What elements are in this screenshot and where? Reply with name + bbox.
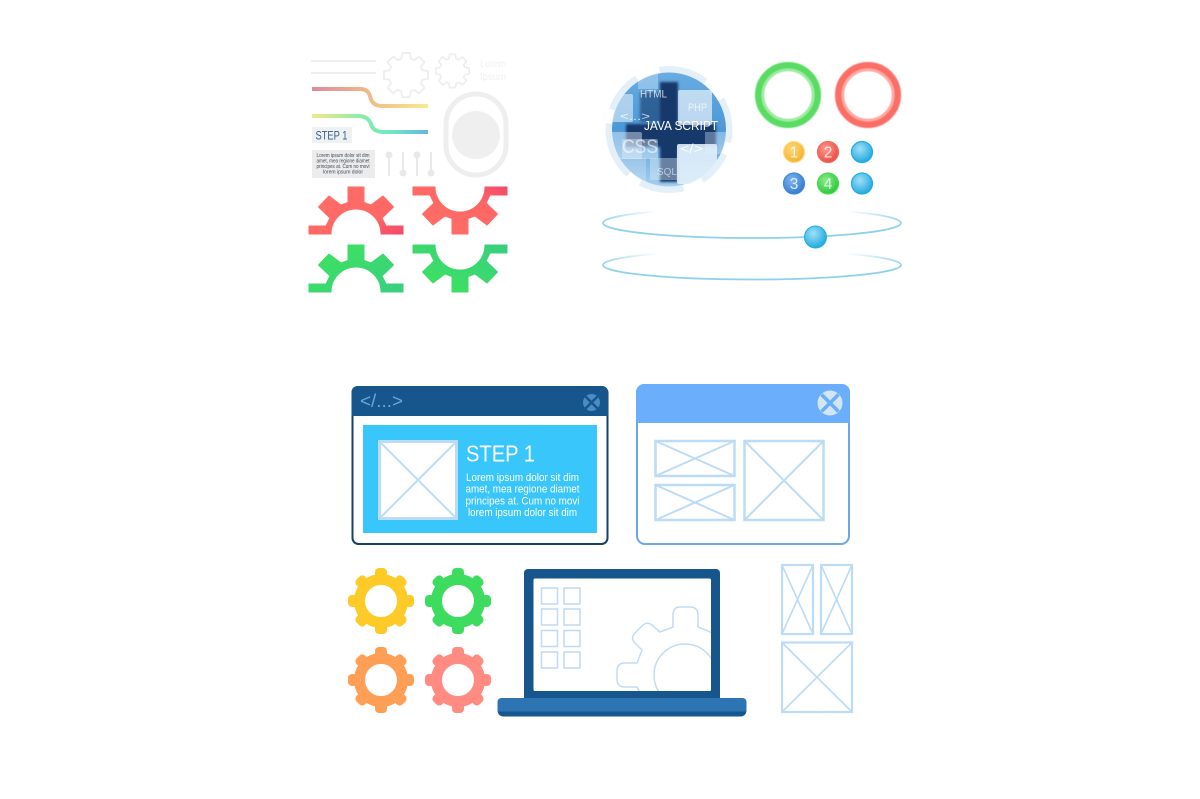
- globe labels: HTML: [640, 88, 667, 100]
- laptop: [498, 569, 746, 716]
- half gears: [309, 187, 507, 292]
- icon: close button: [583, 394, 600, 411]
- laptop screen: [534, 578, 711, 691]
- globe labels: [620, 88, 718, 178]
- gradient line two: [312, 116, 428, 132]
- globe labels: JAVA SCRIPT: [644, 118, 718, 133]
- green gear: [425, 568, 491, 634]
- blue content panel: [363, 425, 597, 533]
- faded caption: Ipsum: [480, 72, 506, 83]
- window header: [352, 386, 608, 416]
- step label: STEP 1: [316, 128, 348, 142]
- gradient line one: [312, 89, 428, 106]
- colored gears: [348, 568, 491, 713]
- oval toggle: [446, 94, 506, 175]
- step description: amet, mea regione diamet: [466, 484, 580, 496]
- code tag: </...>: [360, 391, 403, 411]
- tall wireframe left: [782, 565, 813, 634]
- faded caption: [480, 59, 506, 83]
- slider pins: [386, 152, 434, 176]
- blue button bottom: [852, 173, 872, 194]
- sphere: [612, 72, 726, 186]
- globe labels: <...>: [620, 111, 650, 123]
- step heading: STEP 1: [466, 440, 535, 466]
- red half gear, cup: [413, 187, 507, 234]
- faded caption: Lorem: [480, 59, 506, 70]
- orange gear: [348, 647, 414, 713]
- text block: amet, mea regione diamet: [316, 158, 370, 164]
- sphere contents: [612, 73, 726, 184]
- orbit slider: [603, 208, 901, 280]
- square wireframe: [782, 642, 852, 712]
- globe labels: </>: [680, 141, 703, 156]
- icon: close button: [818, 390, 842, 416]
- lower orbit: [603, 250, 901, 280]
- app icon grid: [542, 588, 580, 668]
- wireframe thumbnails: [782, 565, 852, 712]
- gray lines: [311, 61, 376, 73]
- green half gear, arch: [309, 245, 403, 292]
- tall wireframe right: [821, 565, 852, 634]
- window frame: [637, 385, 849, 544]
- text block: Lorem ipsum dolor sit dim: [316, 153, 370, 159]
- red half gear, arch: [309, 187, 403, 234]
- button 4: 4: [824, 176, 833, 193]
- image placeholder: [380, 442, 456, 518]
- text block: [312, 150, 375, 178]
- screen gear outline: [616, 606, 711, 691]
- numbered buttons: [784, 142, 872, 194]
- green ring: [760, 66, 816, 124]
- step description: lorem ipsum dolor sit dim: [468, 507, 577, 519]
- globe labels: SQL: [657, 167, 677, 178]
- outer shards: [588, 48, 750, 211]
- step description: Lorem ipsum dolor sit dim: [466, 472, 579, 484]
- window frame: [352, 387, 608, 544]
- icon: small outline gear: [436, 54, 469, 88]
- globe of web technologies: [606, 66, 732, 193]
- panel: step window: [352, 386, 608, 544]
- panel: wireframe window: [636, 384, 850, 544]
- panel: faded UI kit: [311, 53, 506, 178]
- button 2: 2: [824, 144, 832, 162]
- step description: [466, 472, 580, 519]
- slider knob: [804, 226, 826, 248]
- window header: [636, 384, 850, 423]
- text block: lorem ipsum dolor: [323, 170, 363, 176]
- green half gear, cup: [413, 245, 507, 292]
- globe labels: PHP: [688, 102, 707, 114]
- laptop bezel: [524, 569, 720, 698]
- wireframe blocks: [656, 441, 824, 520]
- upper orbit: [603, 208, 901, 238]
- pink gear: [425, 647, 491, 713]
- infographic canvas: [308, 52, 902, 716]
- step description: principes at. Cum no movi: [466, 496, 580, 508]
- laptop base: [498, 698, 746, 716]
- button 1: 1: [790, 144, 798, 162]
- icon: large outline gear: [384, 53, 428, 97]
- globe labels: CSS: [622, 137, 658, 158]
- button 3: 3: [790, 176, 798, 193]
- blue button top: [852, 142, 872, 162]
- yellow gear: [348, 568, 414, 634]
- text block: principes at. Cum no movi: [316, 164, 370, 170]
- red ring: [840, 66, 896, 124]
